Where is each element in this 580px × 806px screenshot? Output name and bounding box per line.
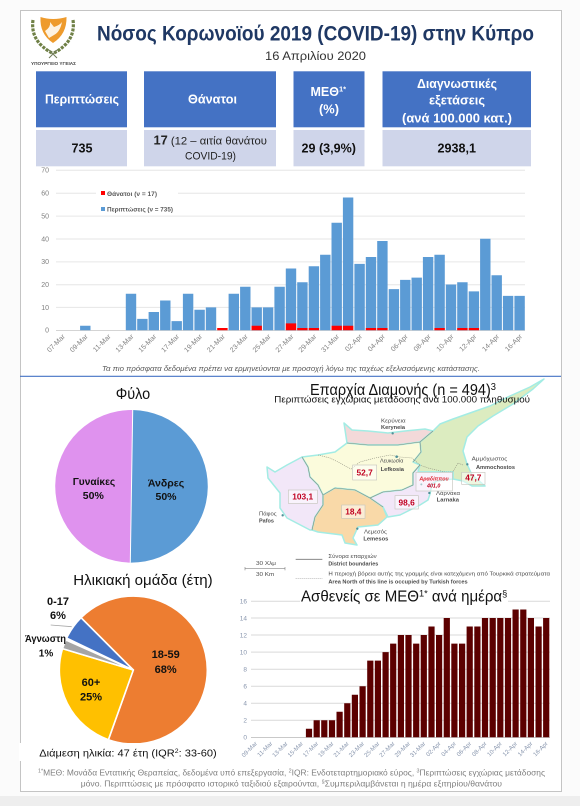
- bar chart: daily cases and deaths: 12-Apr: [459, 333, 479, 353]
- map legend: Area North of this line is occupied by Turkish forces: [328, 580, 468, 586]
- heading: age group: Ηλικιακή ομάδα (έτη): [73, 572, 213, 589]
- panel: diagnostic tests: (ανά 100.000 κατ.): [402, 112, 512, 126]
- panel: residence district map: Λεμεσός: [364, 528, 387, 535]
- panel: ICU: 1*: [339, 84, 346, 94]
- bar chart: ICU patients per day: 8: [243, 666, 247, 674]
- chart note: Τα πιο πρόσφατα δεδομένα πρέπει να ερμηνεύονται με προσοχή λόγω της ταχέως εξελισσόμενης κατάστασης.: [102, 364, 480, 373]
- median age note: Διάμεση ηλικία: 47 έτη (IQR: [39, 748, 168, 760]
- bar chart: ICU patients per day: 2: [243, 718, 247, 724]
- panel: residence district map: Keryneia: [381, 425, 406, 431]
- heading: ICU patients: ανά ημέρα: [428, 589, 502, 606]
- heading: sex: Φύλο: [116, 386, 150, 403]
- panel: residence district map: Κερύνεια: [381, 418, 406, 425]
- bar chart: ICU patients per day: 10: [240, 650, 247, 656]
- panel: residence district map: Pafos: [259, 519, 274, 525]
- panel: cases: Περιπτώσεις: [45, 92, 119, 107]
- panel: age group pie chart: 1%: [39, 649, 53, 660]
- bar chart: daily cases and deaths: 23-Mar: [229, 333, 250, 354]
- bar chart: daily cases and deaths: 15-Mar: [138, 333, 159, 354]
- panel: residence district map: Larnaka: [437, 498, 460, 504]
- bar chart: daily cases and deaths: 11-Mar: [92, 333, 113, 354]
- bar chart: daily cases and deaths: 25-Mar: [252, 333, 273, 354]
- panel: sex pie chart: Γυναίκες: [73, 476, 116, 488]
- bar chart: ICU patients per day: [240, 589, 550, 759]
- median age note: : 33-60): [179, 748, 217, 760]
- heading: ICU patients: §: [502, 589, 507, 600]
- footnotes: [38, 768, 545, 789]
- bar chart: ICU patients per day: 23-Mar: [348, 741, 366, 759]
- chart legend: Περιπτώσεις (ν = 735): [107, 206, 173, 214]
- bar chart: ICU patients per day: 0: [243, 734, 247, 742]
- panel: residence district map: Λάρνακα: [436, 490, 461, 497]
- footnotes: IQR: Ενδοτεταρτημοριακό εύρος,: [292, 768, 417, 778]
- panel: deaths: 17 (12 – αιτία θανάτου: [154, 133, 267, 147]
- bar chart: daily cases and deaths: 09-Mar: [69, 333, 90, 354]
- bar chart: daily cases and deaths: 13-Mar: [115, 333, 136, 354]
- panel: diagnostic tests: [382, 71, 531, 166]
- map of Cyprus: [267, 379, 544, 545]
- bar chart: daily cases and deaths: 0: [45, 328, 49, 334]
- scale bar: 30 Χλμ: [256, 561, 276, 567]
- panel: age group pie chart: 18-59: [152, 649, 180, 661]
- map legend: [296, 553, 550, 586]
- chart legend: [96, 184, 178, 214]
- panel: sex pie chart: 50%: [155, 491, 177, 503]
- blue bars: cases: [80, 198, 525, 330]
- panel: ICU: ΜΕΘ: [310, 85, 339, 99]
- footnotes: 1*: [38, 769, 44, 775]
- panel: age group pie chart: [25, 572, 213, 744]
- bar chart: ICU patients per day: 14: [240, 616, 247, 622]
- bar chart: daily cases and deaths: 19-Mar: [183, 333, 204, 354]
- rate boxes: [288, 465, 485, 518]
- bar chart: ICU patients per day: 6: [243, 684, 247, 690]
- panel: residence district map: Αραδίππου: [418, 476, 449, 482]
- bar chart: ICU patients per day: 13-Mar: [272, 741, 290, 759]
- chart legend: Θάνατοι (ν = 17): [107, 191, 157, 198]
- bar chart: ICU patients per day: 09-Mar: [241, 741, 259, 759]
- panel: residence district map: 401,0: [426, 483, 440, 489]
- bar chart: ICU patients per day: 12: [240, 632, 247, 640]
- map legend: District boundaries: [328, 562, 378, 568]
- bar chart: ICU patients per day: 16: [240, 598, 247, 606]
- panel: sex pie chart: 50%: [83, 490, 104, 502]
- panel: residence district map: [245, 379, 550, 586]
- panel: ICU: [294, 71, 364, 166]
- panel: ICU: (%): [319, 102, 339, 116]
- panel: deaths: COVID-19): [185, 150, 236, 162]
- bar chart: ICU patients per day: 12-Apr: [502, 741, 519, 758]
- heading: district: 3: [491, 382, 496, 393]
- heading: ICU patients: 1*: [419, 589, 428, 600]
- bar chart: daily cases and deaths: 60: [41, 190, 49, 198]
- panel: age group pie chart: Άγνωστη: [25, 634, 66, 645]
- bar chart: daily cases and deaths: 27-Mar: [275, 333, 296, 354]
- bar chart: ICU patients per day: 02-Apr: [426, 741, 443, 758]
- footnotes: §: [322, 780, 325, 786]
- bar chart: ICU patients per day: 10-Apr: [487, 741, 504, 758]
- bar chart: daily cases and deaths: 30: [41, 259, 49, 266]
- panel: deaths: Θάνατοι: [188, 92, 237, 107]
- heading: ICU patients: Ασθενείς σε ΜΕΘ: [301, 589, 422, 606]
- footnotes: 2: [289, 769, 292, 775]
- panel: residence district map: Lemesos: [363, 537, 388, 543]
- panel: diagnostic tests: Διαγνωστικές: [417, 77, 497, 91]
- logo: Ministry of Health emblem: [31, 17, 76, 66]
- bar chart: ICU patients per day: 06-Apr: [456, 741, 473, 758]
- bar chart: ICU patients per day: 08-Apr: [471, 741, 488, 758]
- panel: deaths: [144, 71, 276, 166]
- bar chart: daily cases and deaths: 40: [41, 236, 49, 244]
- panel: cases: [36, 71, 127, 166]
- panel: residence district map: 52,7: [357, 467, 373, 477]
- panel: diagnostic tests: εξετάσεις: [429, 94, 485, 108]
- map legend: Σύνορα επαρχιών: [328, 553, 377, 560]
- panel: ICU: 29 (3,9%): [302, 142, 356, 156]
- bar chart: daily cases and deaths: 70: [41, 168, 49, 174]
- bar chart: daily cases and deaths: 29-Mar: [298, 333, 319, 354]
- bar chart: daily cases and deaths: 14-Apr: [481, 333, 502, 353]
- scale bar: [245, 561, 285, 578]
- bar chart: daily cases and deaths: 20: [41, 282, 49, 289]
- bar chart: ICU patients per day: 17-Mar: [302, 741, 320, 759]
- bar chart: ICU patients per day: 31-Mar: [410, 741, 427, 759]
- panel: residence district map: Πάφος: [259, 511, 277, 518]
- panel: age group pie chart: 6%: [50, 610, 66, 622]
- bar chart: daily cases and deaths: 10: [41, 305, 49, 312]
- date: 16 Απριλίου 2020: [265, 49, 366, 63]
- bar chart: ICU patients per day: 14-Apr: [517, 741, 534, 758]
- logo: Ministry of Health emblem: ΥΠΟΥΡΓΕΙΟ ΥΓΕΙΑΣ: [31, 61, 76, 66]
- bar chart: ICU patients per day: 25-Mar: [364, 741, 381, 759]
- footnotes: ΜΕΘ: Μονάδα Εντατικής Θεραπείας, δεδομένα υπό επεξεργασία,: [43, 768, 289, 778]
- median age note: 2: [175, 748, 179, 755]
- heading: district: Επαρχία Διαμονής (n = 494): [310, 382, 504, 399]
- footnotes: 3: [417, 769, 420, 775]
- heading: ICU patients: [300, 589, 508, 606]
- red bars: deaths: [217, 323, 479, 330]
- bar chart: ICU patients per day: 16-Apr: [533, 741, 550, 758]
- scale bar: 30 Km: [256, 572, 275, 578]
- panel: residence district map: 103,1: [292, 491, 313, 501]
- bar chart: daily cases and deaths: 02-Apr: [344, 333, 364, 353]
- bar chart: ICU patients per day: 04-Apr: [441, 741, 458, 758]
- bar chart: ICU patients per day: 29-Mar: [394, 741, 412, 759]
- panel: residence district map: 98,6: [399, 497, 415, 507]
- bar chart: daily cases and deaths: 08-Apr: [413, 333, 433, 353]
- footnotes: Περιπτώσεις εγχώριας μετάδοσης: [420, 768, 545, 778]
- bar chart: ICU patients per day: 19-Mar: [318, 741, 335, 759]
- panel: residence district map: Λευκωσία: [380, 458, 404, 464]
- panel: residence district map: Lefkosia: [381, 467, 405, 473]
- bar chart: daily cases and deaths: 10-Apr: [436, 333, 456, 353]
- panel: residence district map: Ammochostos: [476, 465, 515, 471]
- bar chart: daily cases and deaths: 50: [41, 214, 49, 220]
- median age note: [19, 743, 231, 761]
- bar chart: daily cases and deaths: 04-Apr: [367, 333, 387, 353]
- bar chart: ICU patients per day: 27-Mar: [379, 741, 397, 759]
- bar chart: daily cases and deaths: [41, 168, 525, 354]
- panel: age group pie chart: 68%: [155, 664, 177, 676]
- panel: residence district map: 18,4: [345, 506, 362, 516]
- bar chart: ICU patients per day: 15-Mar: [287, 741, 305, 759]
- panel: age group pie chart: 0-17: [47, 596, 69, 608]
- panel: sex pie chart: Άνδρες: [148, 478, 185, 490]
- panel: sex pie chart: [55, 386, 208, 563]
- map legend: Η περιοχή βόρεια αυτής της γραμμής είναι κατεχόμενη από Τουρκικά στρατεύματα: [328, 570, 550, 577]
- subheading: district: Περιπτώσεις εγχώριας μετάδοσης ανά 100.000 πληθυσμού: [274, 394, 530, 406]
- bar chart: daily cases and deaths: 21-Mar: [206, 333, 227, 354]
- footnotes: μόνο. Περιπτώσεις με πρόσφατο ιστορικό ταξιδιού εξαιρούνται,: [81, 779, 319, 789]
- bar chart: daily cases and deaths: 31-Mar: [320, 333, 342, 354]
- bar chart: daily cases and deaths: 06-Apr: [390, 333, 410, 353]
- panel: age group pie chart: 60+: [82, 677, 100, 689]
- bar chart: daily cases and deaths: 16-Apr: [504, 333, 524, 353]
- bar chart: daily cases and deaths: 17-Mar: [160, 333, 182, 354]
- panel: cases: 735: [72, 142, 93, 156]
- panel: residence district map: 47,7: [465, 473, 482, 483]
- bar chart: ICU patients per day: 11-Mar: [257, 741, 274, 759]
- panel: residence district map: Αμμόχωστος: [472, 455, 508, 462]
- bar chart: daily cases and deaths: 07-Mar: [46, 333, 67, 354]
- footnotes: Συμπεριλαμβάνεται η ημέρα εξιτηρίου/θανάτου: [325, 779, 502, 789]
- bar chart: ICU patients per day: 21-Mar: [333, 741, 351, 759]
- panel: diagnostic tests: 2938,1: [438, 142, 476, 156]
- bar chart: ICU patients per day: 4: [243, 700, 247, 708]
- title: Νόσος Κορωνοϊού 2019 (COVID-19) στην Κύπρο: [97, 23, 534, 46]
- panel: age group pie chart: 25%: [80, 692, 102, 704]
